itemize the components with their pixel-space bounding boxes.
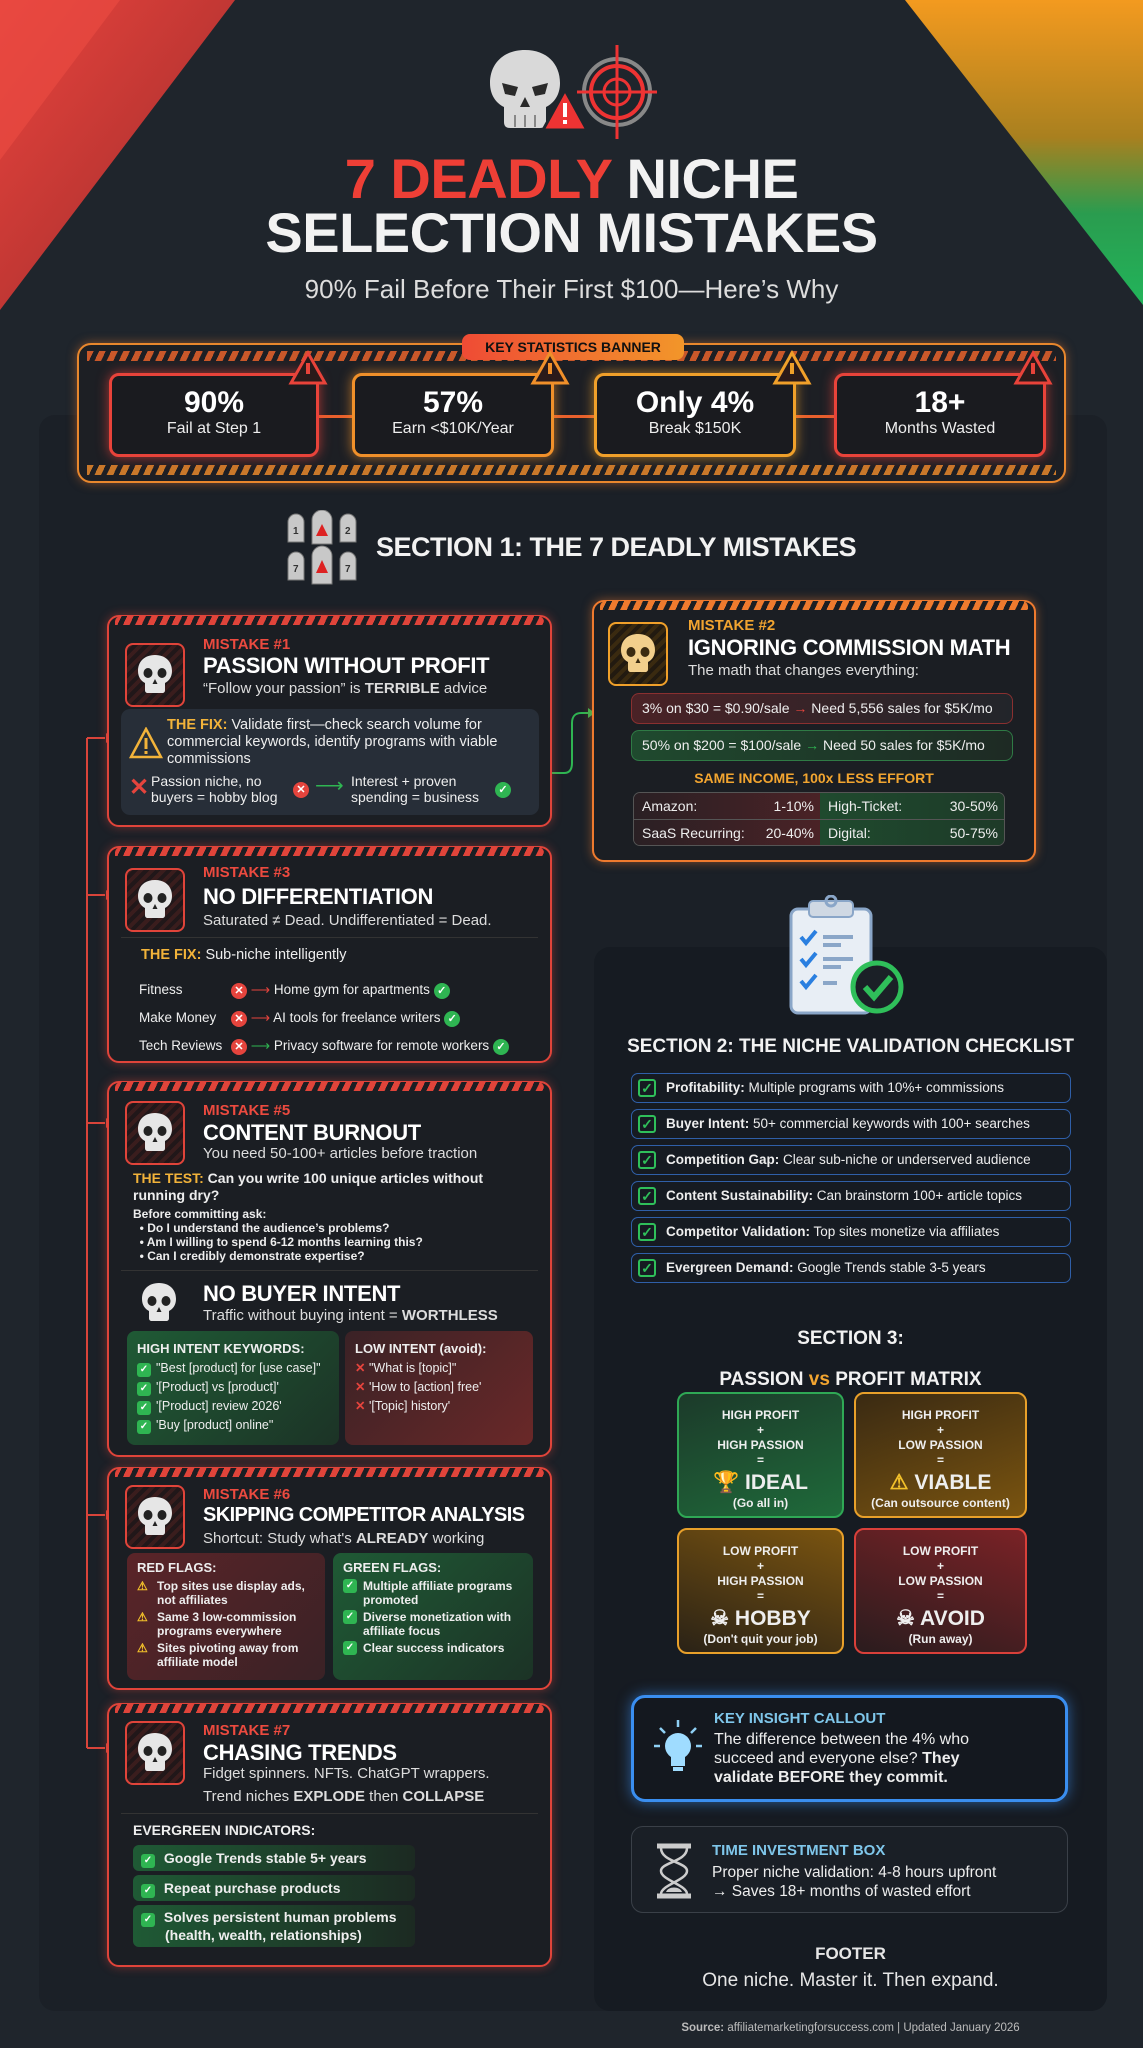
stat: 4%: Break $150K (649, 420, 741, 437)
stat: 90%: 90% (184, 386, 244, 419)
icon: clipboard (790, 895, 904, 1014)
panel: mistake 3: MISTAKE #3 (203, 864, 290, 881)
green flags: Clear success indicators (363, 1641, 504, 1655)
green flags: ✓ (346, 1642, 354, 1653)
checklist: ✓ (641, 1116, 653, 1132)
panel: mistake 7 (107, 1703, 552, 1967)
icon: hourglass (657, 1844, 691, 1898)
sub-niche rows (139, 982, 509, 1055)
icon: tombstones: 1 (293, 526, 299, 537)
stat: 4% (594, 373, 796, 457)
icon: skull (125, 868, 185, 932)
subtitle: 90% Fail Before Their First $100—Here’s Why (305, 274, 838, 304)
icon: tombstones: 7 (345, 564, 351, 575)
checklist: Evergreen Demand: Google Trends stable 3-5 years (666, 1260, 986, 1275)
cell: hobby (677, 1528, 844, 1654)
commission table (633, 792, 1005, 846)
fix box: buyers = hobby blog (151, 789, 277, 805)
title (265, 147, 878, 264)
panel: mistake 5 and no buyer intent: You need 50-100+ articles before traction (203, 1145, 477, 1162)
icon: tombstones: 2 (345, 526, 351, 537)
panel: mistake 2: IGNORING COMMISSION MATH (688, 635, 1010, 660)
panel: mistake 5 and no buyer intent: CONTENT BURNOUT (203, 1120, 421, 1145)
high intent box: ✓ (140, 1364, 148, 1375)
section 1 heading (288, 510, 856, 584)
checklist (631, 1073, 1071, 1283)
commission table: Amazon: (642, 798, 697, 814)
stat: 18+: Months Wasted (885, 420, 995, 437)
cell: viable: (Can outsource content) (871, 1496, 1010, 1510)
fix box: ✕ (296, 784, 306, 796)
high intent box (127, 1331, 339, 1445)
panel: mistake 5 and no buyer intent: Before committing ask: (133, 1207, 266, 1221)
source line: Source: affiliatemarketingforsuccess.com | Updated January 2026 (681, 2022, 1020, 2034)
footer: FOOTER (815, 1944, 886, 1963)
cell: hobby: LOW PROFIT (723, 1544, 798, 1558)
panel: mistake 7: CHASING TRENDS (203, 1740, 397, 1765)
section 3 title: PASSION vs PROFIT MATRIX (719, 1369, 982, 1390)
green flags: ✓ (346, 1580, 354, 1591)
connector lines (86, 733, 107, 1753)
warning icons on stats (288, 350, 1052, 384)
main dark panel (39, 415, 1107, 2011)
cell: hobby: (Don't quit your job) (703, 1632, 818, 1646)
footer (702, 1944, 999, 1991)
panel: mistake 7: Fidget spinners. NFTs. ChatGPT wrappers. (203, 1765, 490, 1782)
panel: mistake 5 and no buyer intent (107, 1081, 552, 1457)
time investment box: TIME INVESTMENT BOX (712, 1842, 885, 1859)
red flags (127, 1553, 325, 1680)
fix box: ✕ (129, 774, 149, 801)
red flags: Same 3 low-commission programs everywhere (157, 1610, 296, 1638)
icon: tombstones (288, 510, 356, 584)
panel: mistake 2: The math that changes everything: (688, 662, 919, 679)
section 2 title: SECTION 2: THE NICHE VALIDATION CHECKLIST (627, 1036, 1074, 1057)
stat: 57%: Earn <$10K/Year (392, 420, 514, 437)
panel: mistake 7: ✓ (144, 1885, 152, 1896)
icon: lightbulb (654, 1720, 702, 1771)
cell: ideal: HIGH PROFIT (722, 1408, 799, 1422)
panel: mistake 6: Shortcut: Study what's ALREADY working (203, 1530, 484, 1547)
time investment box: → Saves 18+ months of wasted effort (712, 1883, 971, 1900)
fix box: THE FIX: Validate first—check search volume for commercial keywords, identify programs with viable commissions (167, 717, 497, 767)
fix box: Passion niche, no (151, 773, 262, 789)
sub-niche rows: ⟶ Home gym for apartments (251, 982, 430, 997)
section 3 title (719, 1328, 982, 1390)
title: SELECTION MISTAKES (265, 201, 878, 264)
panel: mistake 7: Trend niches EXPLODE then COLLAPSE (203, 1788, 484, 1805)
panel: mistake 6: MISTAKE #6 (203, 1486, 290, 1503)
high intent box: ✓ (140, 1421, 148, 1432)
high intent box: '[Product] review 2026' (156, 1399, 282, 1413)
red flags: ⚠ (137, 1641, 148, 1655)
panel: mistake 2: SAME INCOME, 100x LESS EFFORT (694, 770, 934, 786)
panel: mistake 1: PASSION WITHOUT PROFIT (203, 653, 489, 678)
checklist: Content Sustainability: Can brainstorm 100+ article topics (666, 1188, 1022, 1203)
cell: ideal (677, 1392, 844, 1518)
commission table: 30-50% (950, 798, 998, 814)
icon: skull plain (142, 1283, 176, 1321)
icon: golden skull (608, 622, 668, 686)
high intent box: '[Product] vs [product]' (156, 1380, 279, 1394)
cell: avoid: = (937, 1589, 944, 1603)
red flags: Sites pivoting away from affiliate model (157, 1641, 298, 1669)
stat: 57%: 57% (423, 386, 483, 419)
checklist: Competitor Validation: Top sites monetize via affiliates (666, 1224, 999, 1239)
cell: ideal: 🏆 IDEAL (713, 1471, 808, 1494)
cell: ideal: HIGH PASSION (717, 1438, 804, 1452)
green flags: Diverse monetization with affiliate focus (363, 1610, 511, 1638)
panel: mistake 3: NO DIFFERENTIATION (203, 884, 433, 909)
arrow: M1 to M2 (552, 708, 592, 774)
panel: mistake 2: 50% on $200 = $100/sale → Need 50 sales for $5K/mo (642, 737, 985, 753)
sub-niche rows: ✕ (234, 985, 244, 997)
panel: mistake 7: (health, wealth, relationships) (165, 1927, 362, 1943)
stat: 18+ (834, 373, 1046, 457)
checklist: Competition Gap: Clear sub-niche or underserved audience (666, 1152, 1031, 1167)
cell: avoid: (Run away) (908, 1632, 972, 1646)
cell: viable (854, 1392, 1027, 1518)
stat: 90%: Fail at Step 1 (167, 420, 261, 437)
panel: mistake 3 (107, 846, 552, 1063)
low intent box (345, 1331, 533, 1445)
icon: skull (125, 1485, 185, 1549)
cell: viable: ⚠ VIABLE (890, 1471, 991, 1494)
red flags: RED FLAGS: (137, 1560, 216, 1575)
evergreen pills: ✓ (144, 1855, 152, 1866)
stat: 90% (109, 373, 319, 457)
icon: skull (125, 1101, 185, 1165)
panel: mistake 3: Saturated ≠ Dead. Undifferentiated = Dead. (203, 912, 492, 929)
cell: avoid (854, 1528, 1027, 1654)
cell: viable: HIGH PROFIT (902, 1408, 979, 1422)
low intent box: ✕ 'How to [action] free' (355, 1380, 481, 1394)
background decor: corner bands (0, 0, 1143, 310)
checklist: ✓ (641, 1224, 653, 1240)
sub-niche rows: ✕ (234, 1013, 244, 1025)
math rows: 3% on $30 = $0.90/sale → Need 5,556 sales for $5K/mo (642, 700, 993, 716)
sub-niche rows: ✓ (448, 1013, 457, 1025)
panel: mistake 7: EVERGREEN INDICATORS: (133, 1822, 315, 1838)
cell: ideal: (Go all in) (733, 1496, 788, 1510)
panel: mistake 7: MISTAKE #7 (203, 1722, 290, 1739)
title: 7 DEADLY NICHE (345, 147, 798, 210)
panel: mistake 5 and no buyer intent: MISTAKE #5 (203, 1102, 290, 1119)
red flags: Top sites use display ads, not affiliates (157, 1579, 305, 1607)
section 2/3 panel (594, 947, 1107, 2011)
fix box: ⟶ (315, 775, 344, 797)
sub-niche rows: ✓ (437, 985, 446, 997)
sub-niche rows: ✕ (234, 1041, 244, 1053)
high intent box: ✓ (140, 1383, 148, 1394)
sub-niche rows: Make Money (139, 1010, 216, 1025)
fix box: ✓ (498, 784, 508, 796)
red flags: ⚠ (137, 1579, 148, 1593)
stat: 18+: 18+ (915, 386, 965, 419)
cell: ideal: = (757, 1453, 764, 1467)
high intent box: HIGH INTENT KEYWORDS: (137, 1341, 305, 1356)
sub-niche rows: ⟶ Privacy software for remote workers (251, 1038, 489, 1053)
cell: hobby: = (757, 1589, 764, 1603)
checklist: Profitability: Multiple programs with 10%+ commissions (666, 1080, 1004, 1095)
title icons: skull, warning, target (490, 45, 657, 139)
green flags: Multiple affiliate programs promoted (363, 1579, 512, 1607)
key insight callout (631, 1695, 1068, 1802)
key insight callout: KEY INSIGHT CALLOUT (714, 1710, 885, 1727)
commission table: 1-10% (774, 798, 814, 814)
low intent box: LOW INTENT (avoid): (355, 1341, 486, 1356)
cell: avoid: LOW PASSION (898, 1574, 983, 1588)
panel: mistake 2 (592, 600, 1036, 862)
sub-niche rows: Tech Reviews (139, 1038, 222, 1053)
commission table: 50-75% (950, 825, 998, 841)
evergreen pills: Google Trends stable 5+ years (164, 1850, 367, 1866)
panel: mistake 5 and no buyer intent: • Am I willing to spend 6-12 months learning this? (140, 1235, 423, 1249)
matrix (677, 1392, 1027, 1654)
high intent box: "Best [product] for [use case]" (156, 1361, 321, 1375)
panel: mistake 1: MISTAKE #1 (203, 636, 290, 653)
icon: skull (125, 643, 185, 707)
cell: viable: = (937, 1453, 944, 1467)
cell: viable: LOW PASSION (898, 1438, 983, 1452)
panel: mistake 5 and no buyer intent: • Can I credibly demonstrate expertise? (140, 1249, 365, 1263)
panel: mistake 1: “Follow your passion” is TERRIBLE advice (203, 680, 487, 697)
panel: mistake 5 and no buyer intent: NO BUYER INTENT (203, 1281, 400, 1306)
banner label (462, 334, 684, 360)
cell: ideal: + (757, 1423, 764, 1437)
icon: tombstones: 7 (293, 564, 299, 575)
stat: 57% (352, 373, 554, 457)
cell: avoid: ☠ AVOID (896, 1607, 985, 1630)
math rows (631, 693, 1013, 724)
section 1 title: SECTION 1: THE 7 DEADLY MISTAKES (376, 532, 856, 562)
panel: mistake 3: THE FIX: Sub-niche intelligently (141, 947, 347, 963)
fix box: Interest + proven (351, 773, 456, 789)
panel: mistake 5 and no buyer intent: THE TEST: Can you write 100 unique articles without running dry? (133, 1170, 483, 1203)
evergreen pills (133, 1845, 415, 1871)
panel: mistake 7: Solves persistent human problems (164, 1909, 397, 1925)
checklist: ✓ (641, 1080, 653, 1096)
panel: mistake 7: Repeat purchase products (164, 1880, 340, 1896)
cell: hobby: ☠ HOBBY (710, 1607, 811, 1630)
commission table: 20-40% (766, 825, 814, 841)
checklist: Buyer Intent: 50+ commercial keywords with 100+ searches (666, 1116, 1030, 1131)
cell: avoid: + (937, 1559, 944, 1573)
cell: viable: + (937, 1423, 944, 1437)
commission table: SaaS Recurring: (642, 825, 745, 841)
green flags (333, 1553, 533, 1680)
commission table: Digital: (828, 825, 871, 841)
cell: hobby: + (757, 1559, 764, 1573)
checklist: ✓ (641, 1188, 653, 1204)
sub-niche rows: ✓ (496, 1041, 506, 1053)
stat: 4%: Only 4% (636, 386, 754, 419)
checklist: ✓ (641, 1260, 653, 1276)
high intent box: ✓ (140, 1402, 148, 1413)
cell: hobby: HIGH PASSION (717, 1574, 804, 1588)
panel: mistake 5 and no buyer intent: • Do I understand the audience’s problems? (140, 1221, 389, 1235)
green flags: GREEN FLAGS: (343, 1560, 441, 1575)
panel: mistake 5 and no buyer intent: Traffic without buying intent = WORTHLESS (203, 1307, 498, 1324)
panel: mistake 7: ✓ (144, 1914, 152, 1925)
section 3 title: SECTION 3: (797, 1328, 904, 1349)
fix box: spending = business (351, 789, 479, 805)
time investment box: Proper niche validation: 4-8 hours upfront (712, 1864, 996, 1881)
footer: One niche. Master it. Then expand. (702, 1970, 999, 1991)
key insight callout: The difference between the 4% who succeed and everyone else? They validate BEFORE they commit. (714, 1731, 969, 1786)
fix box (121, 709, 539, 815)
red flags: ⚠ (137, 1610, 148, 1624)
banner label: KEY STATISTICS BANNER (485, 339, 661, 355)
checklist: ✓ (641, 1152, 653, 1168)
icon: skull (125, 1721, 185, 1785)
panel: mistake 2: MISTAKE #2 (688, 617, 775, 634)
cell: avoid: LOW PROFIT (903, 1544, 978, 1558)
sub-niche rows: ⟶ AI tools for freelance writers (251, 1010, 440, 1025)
stats banner (77, 343, 1066, 483)
panel: mistake 1 (107, 615, 552, 827)
green flags: ✓ (346, 1611, 354, 1622)
high intent box: 'Buy [product] online" (156, 1418, 273, 1432)
time investment box (631, 1826, 1068, 1913)
panel: mistake 6: SKIPPING COMPETITOR ANALYSIS (203, 1504, 524, 1526)
panel: mistake 6 (107, 1467, 552, 1690)
commission table: High-Ticket: (828, 798, 902, 814)
low intent box: ✕ '[Topic] history' (355, 1399, 450, 1413)
sub-niche rows: Fitness (139, 982, 183, 997)
low intent box: ✕ "What is [topic]" (355, 1361, 456, 1375)
